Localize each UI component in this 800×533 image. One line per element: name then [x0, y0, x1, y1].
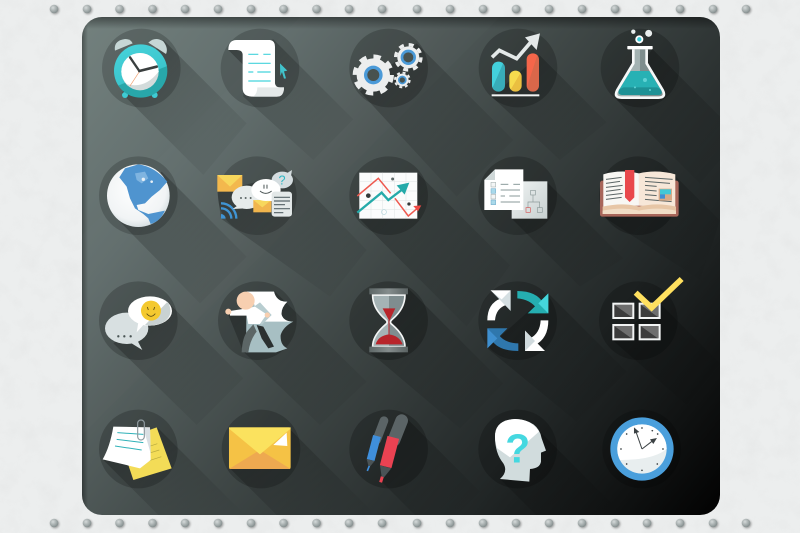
arrow: bottom right — [525, 320, 548, 351]
marker: blue — [367, 421, 384, 471]
icon: sticky notes with paperclip — [99, 410, 198, 504]
icon: globe — [99, 156, 226, 284]
icon: rising bar chart — [478, 28, 572, 130]
marker: red — [380, 421, 402, 482]
icon: person running through torn paper — [218, 282, 326, 389]
icon: messages and communication cluster — [217, 156, 340, 267]
icon: documents and flowchart — [478, 156, 574, 244]
arrow: top left — [487, 290, 511, 320]
smiley face — [141, 301, 161, 321]
icon: chat bubbles with smiley — [99, 282, 220, 400]
icon: yellow envelope — [222, 410, 319, 498]
icon: hourglass — [350, 282, 450, 380]
icon: paper scroll with cursor — [220, 28, 333, 140]
icon: gears — [350, 28, 476, 160]
icon: blue wall clock — [610, 417, 674, 481]
icon: four cycling arrows — [478, 282, 562, 364]
icon: messages and communication cluster: ? — [278, 174, 286, 188]
icon: chemistry flask — [600, 28, 684, 127]
icon: alarm clock — [102, 28, 234, 160]
top rivet row — [50, 5, 750, 13]
icon: blue and red markers — [350, 410, 430, 488]
bottom rivet row — [50, 519, 750, 527]
panel: dark gradient plate holding the icons — [82, 17, 740, 515]
icon: line chart on paper — [350, 156, 466, 276]
icon: checklist with yellow tick — [599, 277, 684, 360]
icon: head with question mark — [478, 410, 557, 488]
arrow: bottom left — [487, 328, 518, 351]
arrow: top right — [517, 291, 548, 313]
icon: head with question mark: ? — [505, 426, 530, 472]
icon: open book with bookmark — [599, 156, 679, 235]
